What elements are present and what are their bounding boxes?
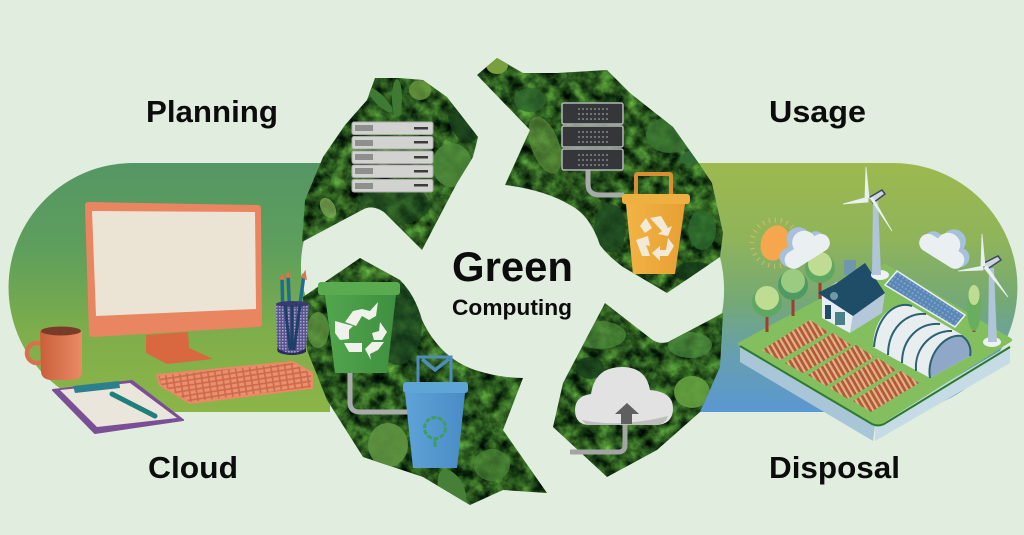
swirl arm right — [600, 250, 724, 350]
panel: foliage top right — [475, 56, 727, 296]
panel: foliage bottom left — [300, 256, 550, 515]
platform sides — [740, 345, 875, 441]
house — [818, 260, 885, 333]
heading: Disposal: Disposal — [769, 450, 900, 485]
icon: keyboard — [157, 362, 312, 403]
icon: pipe between bins — [350, 373, 408, 412]
platform top — [740, 266, 1010, 424]
icon: desktop computer — [85, 202, 262, 364]
cloud right — [916, 215, 980, 274]
icon: dark server rack — [562, 103, 624, 195]
icon: pencil cup — [276, 272, 309, 355]
panel: usage band right — [695, 163, 1017, 412]
subtitle: Computing: Computing — [452, 295, 572, 320]
sun — [752, 220, 798, 266]
monitor stand — [146, 332, 213, 364]
icon: light server rack — [352, 122, 433, 192]
wind turbine right — [958, 234, 1008, 347]
greenhouse — [873, 305, 970, 378]
cloud over sun — [769, 215, 833, 274]
trees — [752, 252, 835, 332]
icon: clipboard and pen — [53, 381, 183, 433]
tall tree — [967, 285, 981, 332]
icon: isometric eco farm — [740, 167, 1010, 441]
heading: Planning: Planning — [146, 94, 278, 129]
panel: planning band left — [9, 163, 330, 412]
heading: Usage: Usage — [769, 94, 866, 129]
icon: coffee mug — [27, 326, 82, 380]
crop fields — [762, 320, 919, 412]
title: Green: Green — [452, 243, 573, 290]
wind turbine left — [843, 167, 892, 280]
icon: cloud upload — [570, 367, 673, 452]
icon: yellow recycling bin — [622, 174, 690, 274]
panel: foliage top left — [298, 76, 483, 256]
screen — [92, 211, 256, 316]
panel: foliage bottom right — [550, 300, 726, 480]
solar panels — [885, 271, 965, 327]
heading: Cloud: Cloud — [148, 450, 238, 485]
swirl arm left — [301, 205, 365, 298]
monitor — [85, 202, 262, 337]
icon: blue bin with ring — [403, 357, 468, 468]
icon: green recycling bin — [318, 282, 400, 373]
